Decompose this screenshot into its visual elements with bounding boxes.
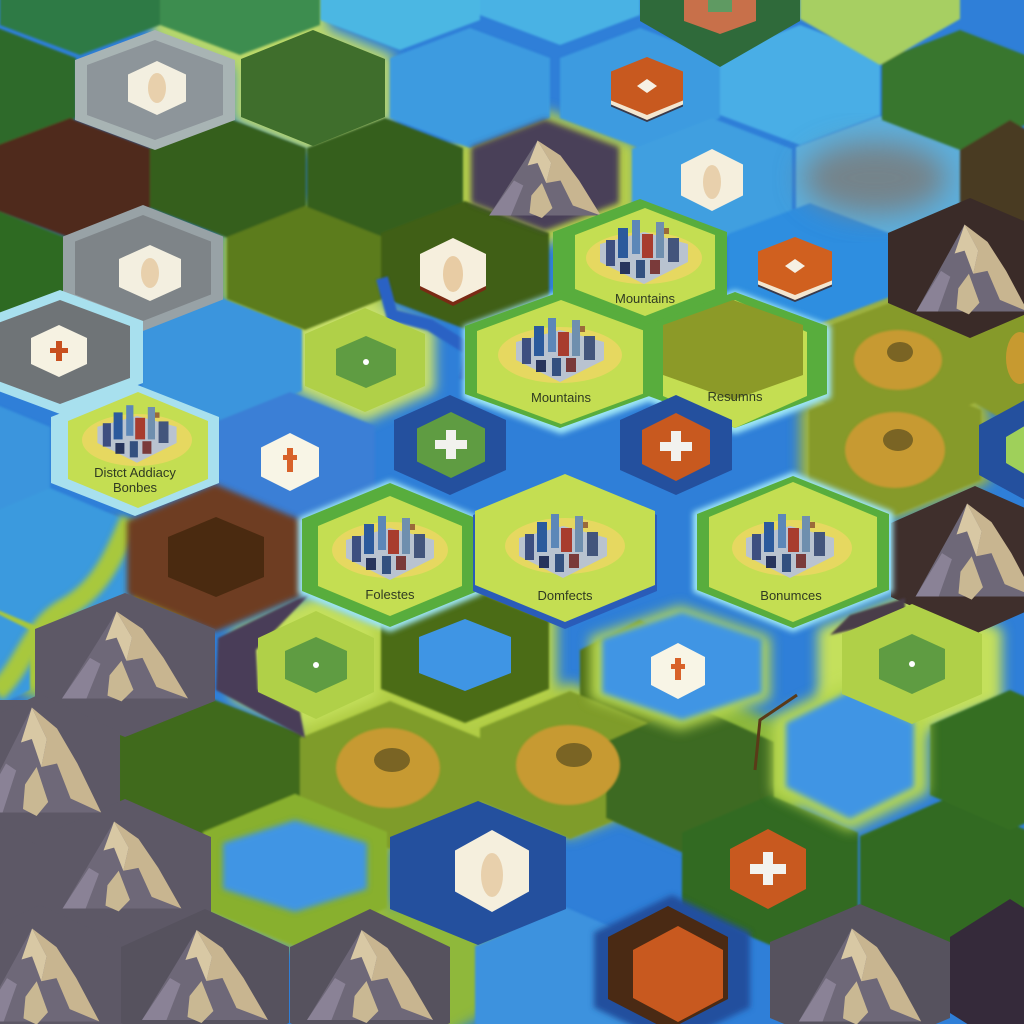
plus tile: green	[394, 395, 506, 495]
city tile: Mountains upper	[553, 199, 727, 331]
orange tile: bottom	[594, 895, 750, 1024]
grey tile: middle left	[63, 205, 223, 331]
light tile with green core: upper	[305, 308, 425, 412]
river crack	[755, 695, 797, 770]
grey tile: top left	[75, 30, 235, 150]
lime coastline	[0, 520, 130, 692]
lagoon halos	[590, 606, 928, 831]
mountain tile: bottom right	[770, 899, 1024, 1024]
lake: lower	[223, 820, 367, 912]
dark blue tile: white tile lower	[390, 801, 566, 945]
mountain tile: centre	[471, 119, 619, 231]
city tile: District Advocacy Bonuses: Distct Addiacy	[94, 465, 176, 480]
shadow band beside crater	[216, 592, 312, 738]
light tile with green core: lower left	[258, 611, 374, 719]
city tile: District Advocacy Bonuses: Bonbes	[113, 480, 158, 495]
cloud over water	[803, 142, 947, 214]
plus tile: orange on green	[730, 829, 806, 909]
small orange tile: top	[611, 57, 683, 122]
gold ore deposits: lower	[336, 725, 620, 808]
olive tile: Resumns: Resumns	[708, 389, 763, 404]
dark green rounded tile: top	[241, 30, 385, 146]
city tile: Bonumces	[697, 476, 889, 628]
mountain tile: right	[888, 198, 1024, 338]
white tile: centre	[420, 238, 486, 306]
white tile: orange cross left	[261, 433, 319, 491]
top tile: orange in dark green	[640, 0, 800, 67]
gold ore deposits: right	[845, 330, 1024, 488]
plus tile: orange on blue	[620, 395, 732, 495]
water hexes	[0, 0, 964, 720]
brown crater tile	[127, 484, 303, 632]
city tile: Mountains upper: Mountains	[615, 291, 675, 306]
city tile: Folestes	[302, 483, 478, 627]
coast glow around city tiles	[298, 290, 893, 632]
river	[382, 278, 470, 380]
city tile: Bonumces: Bonumces	[760, 588, 822, 603]
shadow band under right mountain	[830, 598, 905, 635]
dark blue edge tile	[979, 400, 1024, 500]
city tile: District Advocacy Bonuses	[51, 384, 219, 516]
olive tile: Resumns	[643, 292, 827, 428]
grey tile: light border	[0, 290, 143, 414]
mountain range: lower left	[0, 593, 450, 1024]
mountain tile: right lower	[891, 486, 1024, 634]
city tile: Domfects: Domfects	[538, 588, 593, 603]
lagoon water	[602, 612, 914, 819]
light tile with green core: right	[842, 604, 982, 724]
city tile: Folestes: Folestes	[365, 587, 415, 602]
small orange tile: right	[758, 237, 832, 302]
city tile: Mountains lower: Mountains	[531, 390, 591, 405]
city tile: Domfects	[473, 474, 657, 629]
white tile: orange cross lower	[651, 643, 705, 699]
white tile: orange person upper	[681, 149, 743, 211]
lake: middle	[419, 619, 511, 691]
city tile: Mountains lower	[465, 292, 655, 428]
